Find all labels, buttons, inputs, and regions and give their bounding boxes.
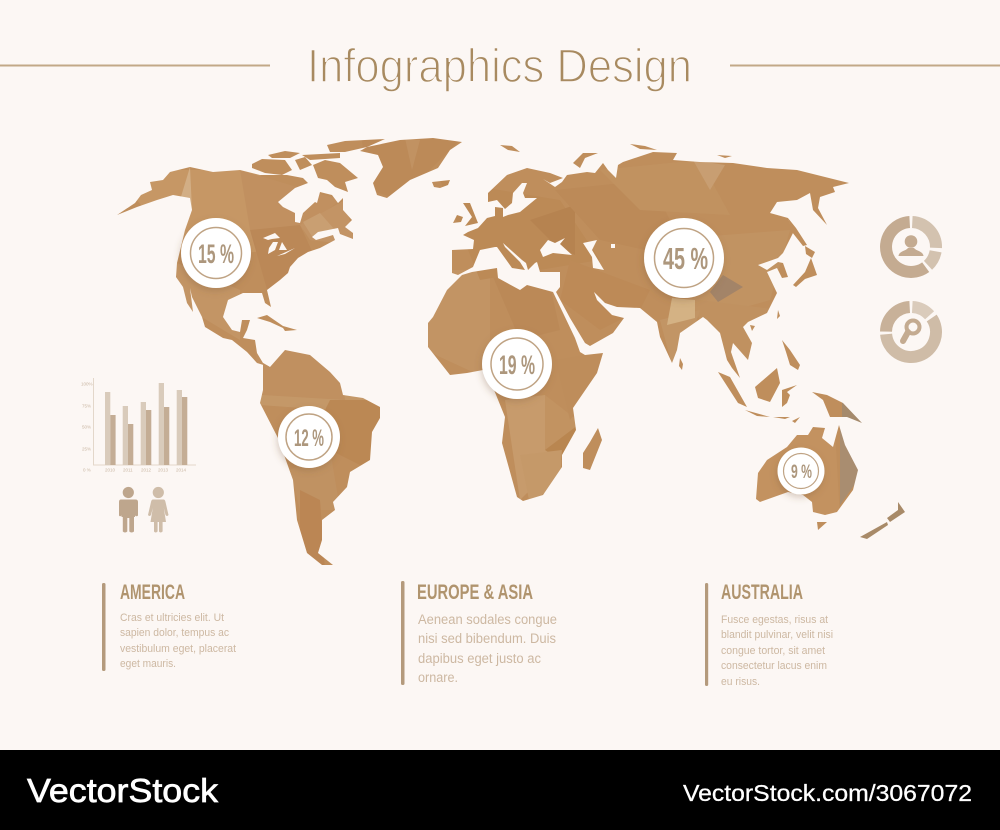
- text block: america: vestibulum eget, placerat: [120, 643, 236, 655]
- text block: europe and asia: nisi sed bibendum. Duis: [418, 631, 556, 646]
- text block: australia: congue tortor, sit amet: [721, 645, 825, 657]
- text block: europe and asia: Aenean sodales congue: [418, 612, 557, 627]
- bar chart: 100%: [81, 382, 93, 386]
- new guinea: [812, 392, 862, 423]
- icon: person donut: [886, 222, 936, 272]
- bar chart: 2010: [105, 468, 116, 472]
- icon: woman: [148, 487, 168, 532]
- marker: 12 percent: [278, 406, 340, 468]
- text block: australia: Fusce egestas, risus at: [721, 614, 828, 626]
- asia islands: [679, 218, 817, 370]
- marker: 9 percent: 9 %: [791, 462, 812, 483]
- text block: australia: blandit pulvinar, velit nisi: [721, 629, 833, 641]
- bar chart: 2013: [158, 468, 169, 472]
- watermark bar: VectorStock: [27, 772, 219, 809]
- indonesia: [718, 368, 800, 423]
- bar chart: 2014: [176, 468, 187, 472]
- icon: man: [119, 487, 138, 532]
- bar chart: 0 %: [83, 468, 91, 472]
- south america: [260, 350, 380, 565]
- marker: 15 percent: 15 %: [198, 239, 234, 269]
- text block: europe and asia: dapibus eget justo ac: [418, 651, 541, 666]
- bar chart: 2012: [141, 468, 152, 472]
- north america: [117, 167, 353, 367]
- uk and ireland: [453, 203, 478, 226]
- bar chart: 2011: [123, 468, 133, 472]
- australia: [756, 425, 858, 530]
- bar chart: 75%: [82, 404, 91, 408]
- africa: [428, 268, 603, 501]
- text block: europe and asia: [401, 581, 557, 685]
- arctic russia islands: [500, 144, 732, 168]
- marker: 45 percent: 45 %: [663, 241, 708, 276]
- icon: search donut: [886, 307, 936, 357]
- seas: black sea and caspian: [540, 238, 615, 270]
- caribbean islands: [257, 315, 297, 331]
- great lakes: [263, 233, 295, 256]
- marker: 9 percent: [778, 448, 824, 494]
- text block: america: AMERICA: [120, 581, 185, 604]
- greenland: [360, 138, 462, 198]
- eurasia: [452, 152, 849, 378]
- arctic islands: [252, 139, 385, 192]
- marker: 19 percent: 19 %: [499, 350, 535, 380]
- world map: [117, 138, 905, 565]
- text block: australia: eu risus.: [721, 676, 760, 688]
- text block: america: eget mauris.: [120, 658, 176, 670]
- text block: america: Cras et ultricies elit. Ut: [120, 612, 224, 624]
- text block: america: sapien dolor, tempus ac: [120, 627, 229, 639]
- bar chart: [81, 378, 196, 472]
- text block: australia: [705, 581, 833, 688]
- watermark bar: VectorStock.com/3067072: [683, 780, 972, 806]
- iceland: [432, 180, 450, 188]
- title with rules: Infographics Design: [307, 39, 692, 92]
- new zealand: [860, 502, 905, 539]
- marker: 12 percent: 12 %: [294, 425, 324, 452]
- text block: america: [102, 581, 236, 671]
- marker: 15 percent: [181, 218, 251, 288]
- bar chart: 50%: [82, 424, 91, 430]
- marker: 45 percent: [644, 218, 724, 298]
- text block: europe and asia: EUROPE & ASIA: [417, 581, 533, 604]
- bar chart: 25%: [82, 446, 91, 452]
- text block: australia: AUSTRALIA: [721, 581, 803, 604]
- watermark bar: [0, 750, 1000, 830]
- text block: australia: consectetur lacus enim: [721, 660, 827, 672]
- marker: 19 percent: [482, 329, 552, 399]
- text block: europe and asia: ornare.: [418, 670, 458, 685]
- madagascar: [583, 428, 602, 470]
